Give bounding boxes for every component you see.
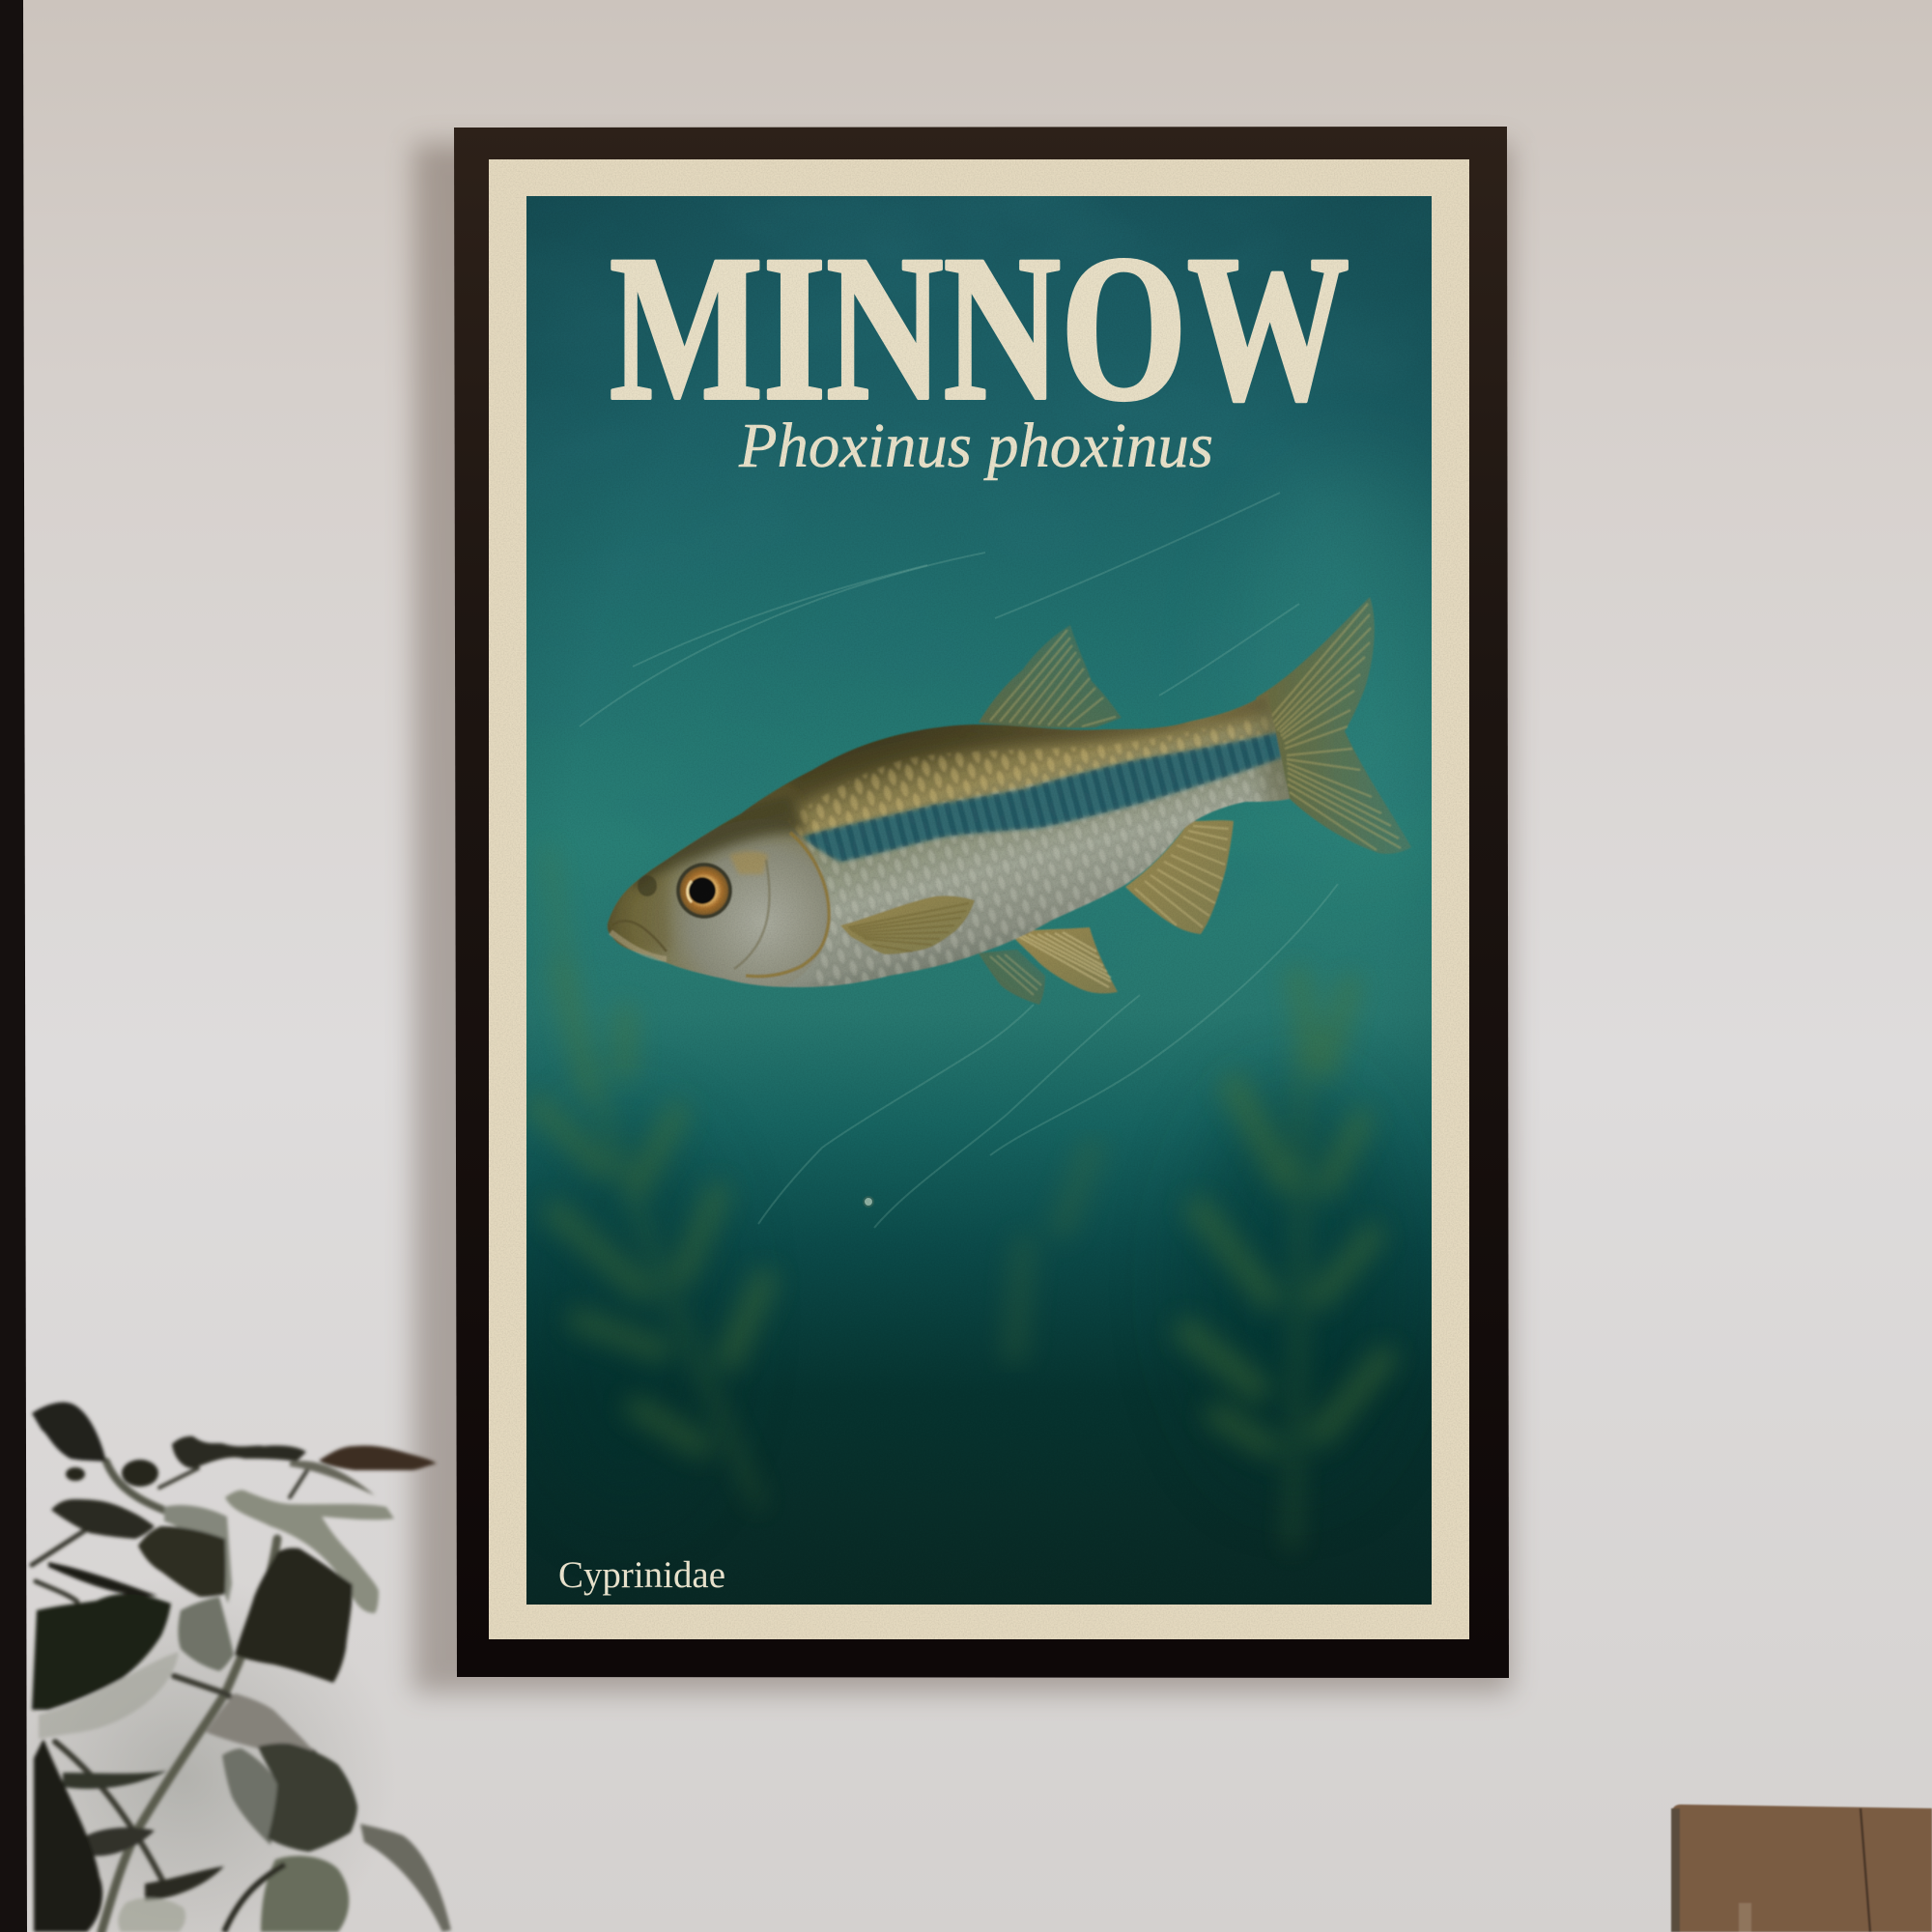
seaweed middle faint [1014,1150,1092,1352]
plant leaves and stems [32,1403,451,1932]
leaf: bottom pale [261,1856,349,1932]
family label: Cyprinidae [558,1554,725,1596]
water streaks [580,493,1338,1228]
leaf: bottom-left mass [34,1739,102,1932]
dark vertical door edge at left [0,0,27,1932]
leaf: lower left branches [63,1771,167,1789]
leaf: dark right with brown edge [235,1548,353,1683]
leaf: upper left dark [51,1499,155,1539]
small buds [66,1460,158,1487]
mat paper grain [489,159,1469,1639]
eye [676,863,732,919]
leaf: grey lower [206,1693,314,1751]
seaweed right [1187,976,1384,1546]
dark shading along back [787,694,1275,807]
leaf: top dark [32,1403,106,1462]
bubble [864,1197,873,1207]
lighter glow right of fish [1288,500,1414,670]
leaf: pale inner [164,1505,232,1604]
pectoral fin [840,895,975,954]
inner gill arc [734,860,770,969]
leaf: bottom small light [118,1898,185,1932]
subtitle: scientific name: Phoxinus phoxinus [738,411,1213,481]
leaf: bottom stem branches [224,1864,285,1932]
nostril [638,875,657,896]
blue lateral stripe [802,731,1287,862]
ventral fin far [1009,927,1118,993]
picture frame [454,127,1509,1678]
silver scales below stripe [802,731,1294,990]
dark shadow behind right seaweed [1202,1076,1387,1279]
leaf: dark centre [138,1526,226,1597]
panel: underwater artwork [526,196,1468,1605]
leaf: brown tipped [319,1446,437,1470]
stripe bars [792,715,1294,869]
seaweed left [538,850,764,1503]
dark shadow behind left seaweed [576,1124,687,1244]
soft grey haze behind plant [0,1575,396,1932]
ventral fin near [979,950,1045,1005]
artwork grain [526,196,1432,1605]
snout shading [607,874,671,952]
leaf: bottom branch dark [87,1828,155,1856]
leaf: tail bottom right [360,1824,451,1932]
tail-base darkening [1256,676,1304,811]
mouth [612,921,667,952]
body surface details [599,676,1304,990]
leaf: pale lower-left [39,1652,179,1739]
head [599,818,830,989]
tail fin [1256,597,1411,854]
leaf: narrow left [48,1562,157,1596]
leaf: grey curved [290,1461,375,1495]
title: MINNOW [610,213,1350,443]
leaf: pale middle [178,1597,234,1671]
leaf: large dark left [32,1594,171,1710]
body [608,693,1290,987]
gill cover arc [746,833,829,977]
frame shadow [413,143,1511,1692]
gold patch above cheek [729,851,768,874]
dorsal fin [979,625,1122,728]
leaf: green-grey lower [222,1748,280,1845]
top of head shading [628,792,807,894]
rear anal fin [1125,820,1234,934]
wooden furniture corner [1671,1804,1932,1932]
water gradient [526,196,1432,1605]
leaf: long dark upper [172,1436,306,1468]
vignette [526,196,1432,479]
fish [599,597,1411,1005]
leaf: dark lower round [258,1744,357,1852]
gold scales above stripe [787,715,1283,837]
leaf: bottom center spray [145,1866,224,1901]
cream paper mat [489,159,1469,1639]
houseplant [0,1403,451,1932]
leaf: pale large [225,1490,394,1613]
lips highlight [611,932,667,959]
water cloud texture [526,196,1432,969]
plant stems and branches [32,1462,314,1932]
